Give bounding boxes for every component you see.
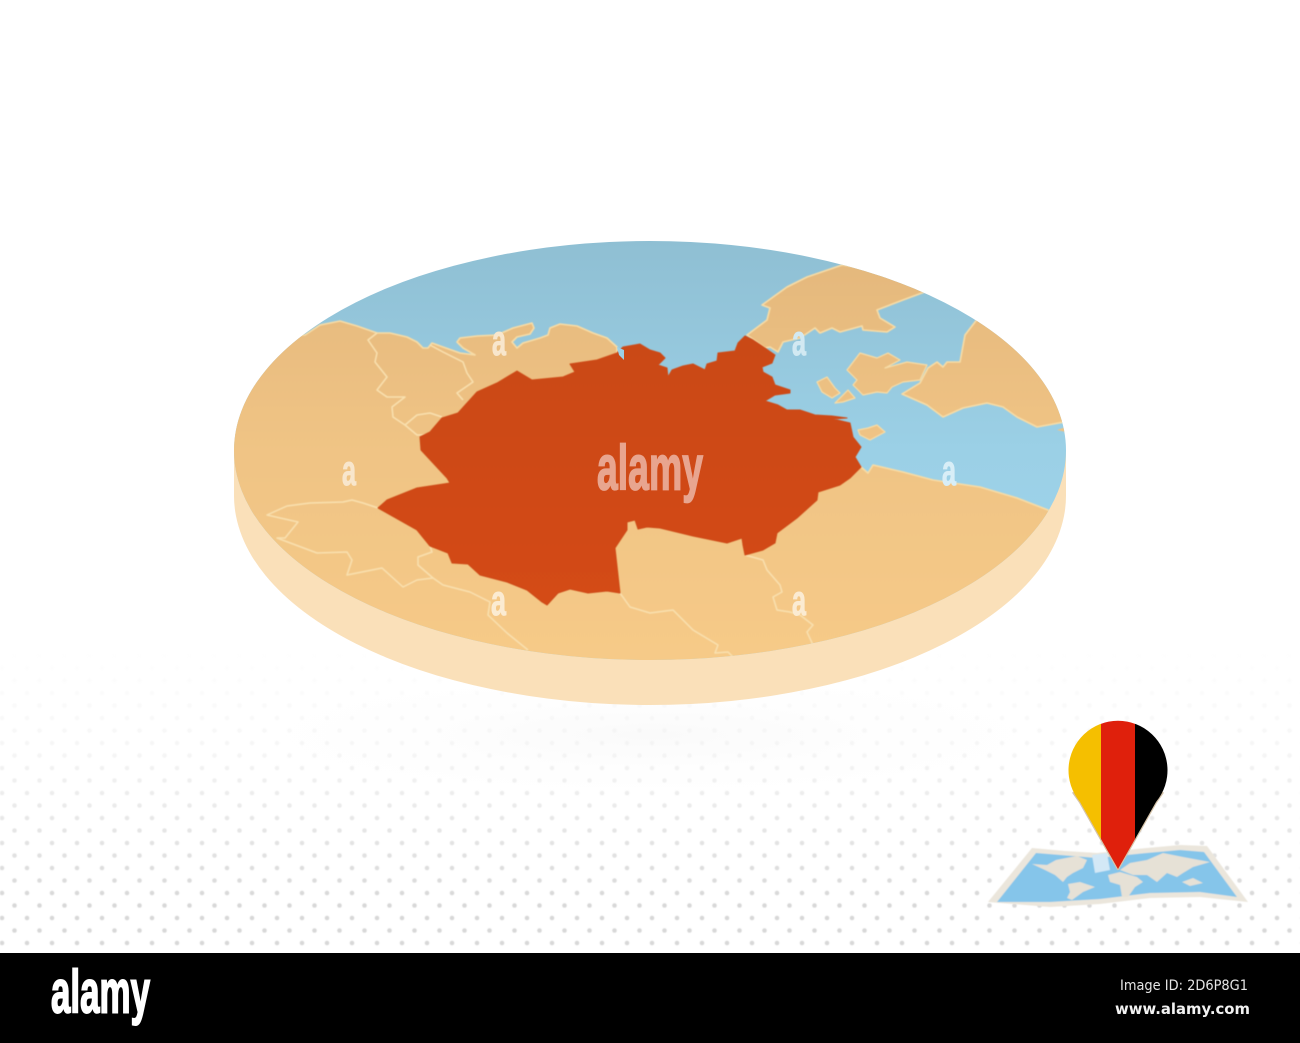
yellow stripe bbox=[1068, 724, 1101, 839]
watermark a west: a bbox=[342, 447, 357, 495]
dotted background pattern bbox=[0, 742, 1292, 946]
small eastern islet bbox=[1057, 427, 1066, 432]
large Danish island bbox=[847, 353, 927, 395]
watermark a south-west: a bbox=[491, 577, 507, 625]
band background bbox=[0, 953, 1300, 1043]
disc side wall bbox=[234, 450, 1066, 705]
Germany highlighted bbox=[378, 336, 861, 605]
softened land shapes bbox=[234, 264, 1064, 660]
round isometric map bbox=[234, 241, 1066, 705]
land and borders on disc bbox=[234, 264, 1064, 660]
watermark a south-east: a bbox=[792, 577, 807, 625]
continents bbox=[1032, 853, 1210, 900]
map pin over paper map bbox=[988, 715, 1248, 907]
folded world map bbox=[988, 845, 1248, 907]
infographic: Germany isometric round map bbox=[0, 241, 1300, 1043]
alamy logo: alamy bbox=[51, 958, 150, 1026]
watermark letters bbox=[342, 317, 957, 625]
Baltic island bbox=[858, 425, 885, 440]
country borders bbox=[267, 333, 813, 657]
map ocean bbox=[997, 850, 1237, 902]
central alamy watermark: alamy bbox=[597, 434, 703, 504]
eastern land bbox=[900, 320, 1062, 428]
small inlet west of Jutland bbox=[617, 347, 624, 360]
red stripe bbox=[1101, 715, 1135, 875]
watermark a north-west: a bbox=[492, 317, 507, 365]
watermark a east: a bbox=[942, 447, 957, 495]
website: www.alamy.com bbox=[1115, 1000, 1250, 1018]
Funen island bbox=[817, 377, 840, 398]
map paper bbox=[988, 845, 1248, 907]
watermark a north-east: a bbox=[792, 317, 807, 365]
pin with German flag stripes bbox=[1068, 720, 1168, 869]
black stripe bbox=[1135, 724, 1168, 839]
Scandinavian peninsula bbox=[747, 265, 930, 352]
pin shadow edge bbox=[1073, 792, 1163, 869]
image id: Image ID: 2D6P8G1 bbox=[1120, 978, 1248, 994]
black footer band bbox=[0, 953, 1300, 1043]
small island bbox=[835, 390, 855, 403]
mainland neighbours bbox=[234, 320, 1049, 660]
disc sea surface bbox=[234, 241, 1066, 660]
soft shadow beneath disc bbox=[180, 665, 1120, 805]
